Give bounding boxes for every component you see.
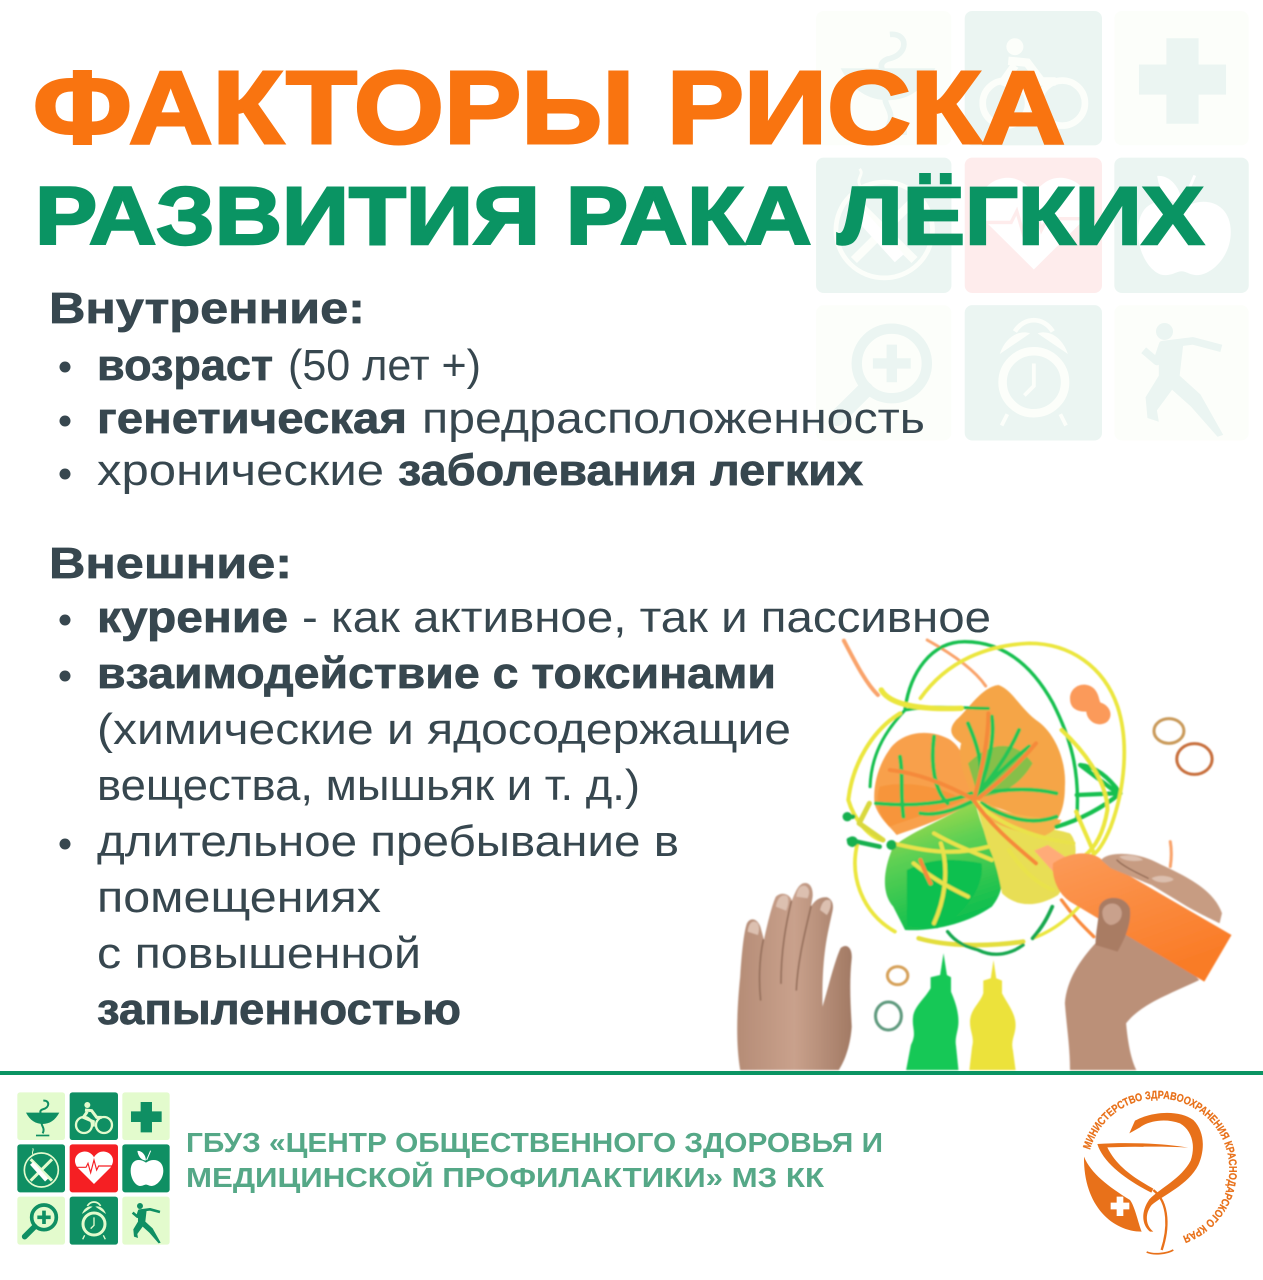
list item: genetics: предрасположенность	[422, 394, 925, 443]
list item: chronic lung disease: хронические	[97, 446, 384, 495]
icon tile: apple	[122, 1144, 170, 1192]
panel: external factors	[49, 539, 991, 1034]
icon tile: magnifier	[17, 1197, 65, 1245]
list item: dusty rooms: с повышенной	[97, 929, 421, 978]
list item: age: (50 лет +)	[288, 341, 481, 390]
panel: internal factors	[49, 284, 925, 495]
icon: right hand palm	[1065, 923, 1199, 1070]
icon: yellow paint bottle	[969, 960, 1016, 1070]
title line 1: ФАКТОРЫ РИСКА	[33, 50, 1065, 165]
footer organization name: МЕДИЦИНСКОЙ ПРОФИЛАКТИКИ» МЗ КК	[186, 1161, 825, 1193]
list item: chronic lung disease	[60, 446, 864, 495]
logo circular text: МИНИСТЕРСТВО ЗДРАВООХРАНЕНИЯ КРАСНОДАРСКОГО КРАЯ	[1082, 1090, 1237, 1244]
icon tile: medical cross	[122, 1092, 170, 1140]
footer icon grid	[17, 1092, 170, 1245]
list item: dusty rooms	[60, 817, 679, 1034]
icon tile: no smoking	[17, 1144, 65, 1192]
list item: genetics: генетическая	[97, 394, 407, 443]
list item: dusty rooms: длительное пребывание в	[97, 817, 679, 866]
list item: chronic lung disease: заболевания легких	[398, 446, 864, 495]
list item: age	[60, 341, 481, 390]
title	[33, 50, 1204, 262]
illustration: hands painting a tie-dye ball	[737, 640, 1232, 1070]
logo: ministry emblem	[1082, 1090, 1237, 1255]
icon: orange paint bottle	[1034, 845, 1232, 982]
heading: internal: Внутренние:	[49, 284, 365, 333]
footer divider	[0, 1071, 1263, 1075]
icon: orange blob	[1070, 685, 1111, 724]
title line 2: РАЗВИТИЯ РАКА ЛЁГКИХ	[35, 171, 1204, 262]
list item: smoking	[60, 593, 991, 642]
list item: toxins: вещества, мышьяк и т. д.)	[97, 761, 640, 810]
list item: smoking: - как активное, так и пассивное	[302, 593, 991, 642]
icon: rubber rings	[876, 719, 1212, 1030]
icon tile: cyclist	[70, 1092, 118, 1140]
logo bowl and snake	[1084, 1113, 1203, 1254]
background watermark icon grid	[816, 11, 1249, 441]
paint strings	[843, 640, 1171, 954]
icon tile: heart with pulse	[70, 1144, 118, 1192]
list item: dusty rooms: запыленностью	[97, 985, 461, 1034]
list item: age: возраст	[97, 341, 273, 390]
list item: toxins: (химические и ядосодержащие	[97, 705, 791, 754]
footer organization name	[186, 1127, 883, 1193]
icon: green paint bottle	[906, 953, 958, 1070]
list item: toxins	[60, 649, 791, 810]
icon tile: bowl of hygieia	[17, 1092, 65, 1140]
list item: genetics	[60, 394, 925, 443]
icon: fingers and thumb	[1096, 854, 1222, 952]
footer organization name: ГБУЗ «ЦЕНТР ОБЩЕСТВЕННОГО ЗДОРОВЬЯ И	[186, 1127, 883, 1158]
list item: toxins: взаимодействие с токсинами	[97, 649, 776, 698]
icon: left hand	[737, 883, 852, 1070]
list item: dusty rooms: помещениях	[97, 873, 381, 922]
icon tile: alarm clock	[70, 1197, 118, 1245]
tie-dye ball	[874, 685, 1076, 930]
heading: external: Внешние:	[49, 539, 292, 588]
icon tile: runner	[122, 1197, 170, 1245]
list item: smoking: курение	[97, 593, 288, 642]
